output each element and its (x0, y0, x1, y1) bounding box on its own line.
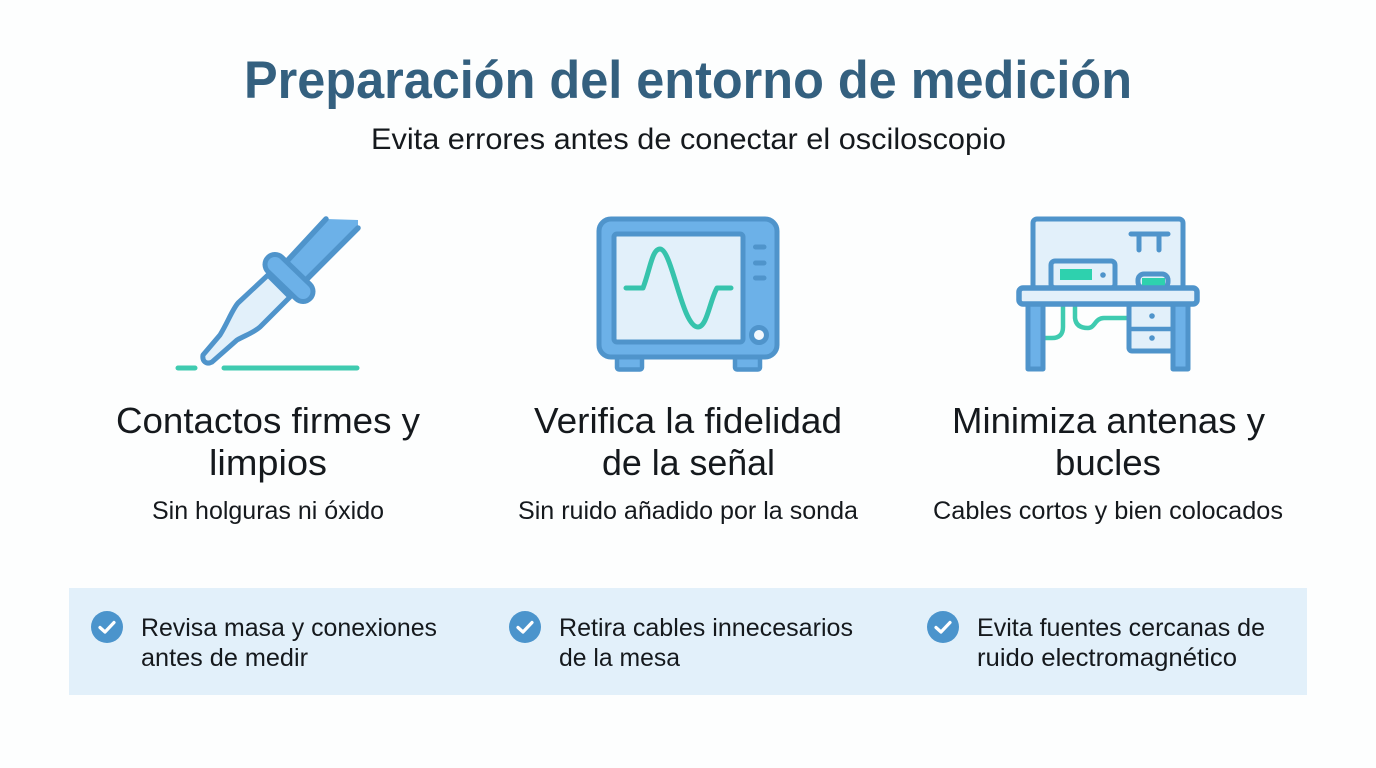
panel: fidelidad de la señal (518, 219, 858, 525)
heading: fidelidad (534, 400, 842, 483)
checklist item 2: de la mesa (559, 644, 680, 672)
panel: minimiza antenas (933, 219, 1283, 525)
heading: antenas: bucles (1055, 442, 1161, 483)
icon: oscilloscope monitor (599, 219, 777, 370)
title: Preparación del entorno de medición (244, 51, 1132, 110)
heading: fidelidad: Verifica la fidelidad (534, 400, 842, 441)
checklist item 3: Evita fuentes cercanas de (977, 614, 1265, 642)
heading: fidelidad: de la señal (602, 442, 775, 483)
text: fidelidad detail: Sin ruido añadido por la sonda (518, 497, 858, 525)
heading: antenas (952, 400, 1265, 483)
subtitle: Evita errores antes de conectar el osciloscopio (371, 123, 1006, 156)
checklist item 2: Retira cables innecesarios (559, 614, 853, 642)
heading: contactos (116, 400, 420, 483)
icon: probe (178, 219, 358, 368)
text: antenas detail: Cables cortos y bien colocados (933, 497, 1283, 525)
panel: contactos firmes (116, 219, 420, 525)
heading: contactos: Contactos firmes y (116, 400, 420, 441)
heading: antenas: Minimiza antenas y (952, 400, 1265, 441)
panel: checklist (69, 588, 1307, 695)
checklist item 3: ruido electromagnético (977, 644, 1237, 672)
checklist item 3 (927, 611, 1265, 672)
checklist item 1: Revisa masa y conexiones (141, 614, 437, 642)
checklist item 1 (91, 611, 437, 672)
heading: contactos: limpios (209, 442, 327, 483)
text: contactos detail: Sin holguras ni óxido (152, 497, 384, 525)
icon: workbench (1019, 219, 1197, 369)
checklist item 1: antes de medir (141, 644, 308, 672)
checklist item 2 (509, 611, 853, 672)
